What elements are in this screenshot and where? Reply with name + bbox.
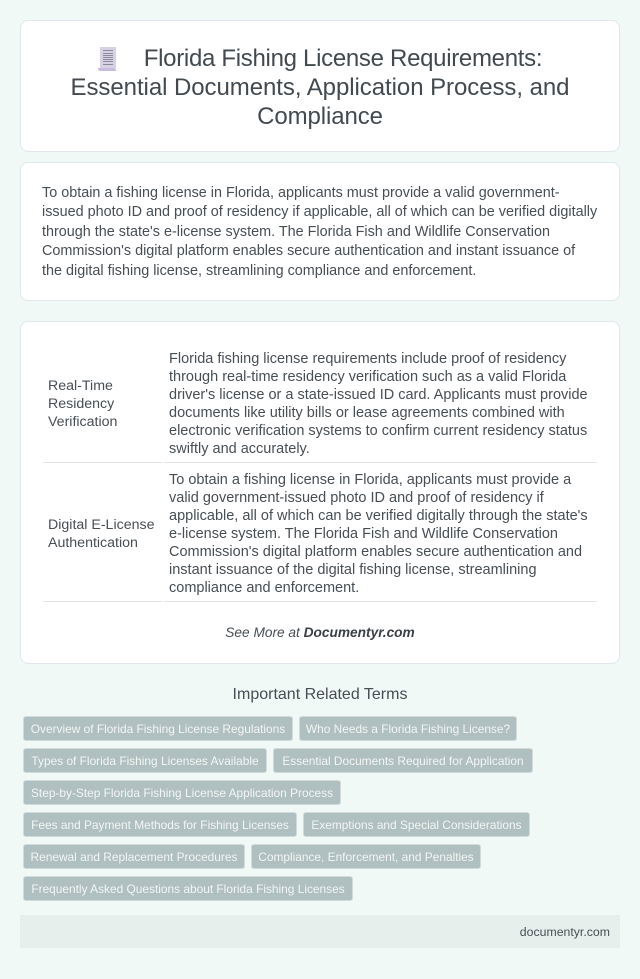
related term tags: Step-by-Step Florida Fishing License Application Process [31, 786, 333, 800]
table row: digital e-license authentication: To obtain a fishing license in Florida, applicants must provide a [169, 472, 571, 488]
title [71, 45, 569, 130]
title: Essential Documents, Application Process, and [71, 74, 569, 101]
related term tags: Frequently Asked Questions about Florida Fishing Licenses [31, 882, 345, 896]
heading: important related terms: Important Related Terms [233, 686, 407, 703]
panel: details table [20, 321, 620, 664]
table row: real-time residency verification: documents like utility bills or lease agreements combined with [169, 405, 565, 421]
text block: introduction: To obtain a fishing license in Florida, applicants must provide a valid government- [42, 185, 560, 201]
table row: real-time residency verification: driver's license or a state-issued ID card. Applicants must provide [169, 387, 588, 403]
table row: digital e-license authentication: instant issuance of the digital fishing license, streamlining [169, 562, 537, 578]
table row: real-time residency verification: Real-Time [48, 378, 113, 394]
text block: introduction [42, 185, 598, 279]
panel: title card [20, 20, 620, 152]
panel: introduction [20, 162, 620, 301]
table row: digital e-license authentication: e-license system. The Florida Fish and Wildlife Conservation [169, 526, 558, 542]
related term tags: Essential Documents Required for Application [282, 754, 524, 768]
table row: real-time residency verification: Verification [48, 414, 117, 430]
table row: digital e-license authentication [43, 472, 597, 602]
title: Florida Fishing License Requirements: [144, 45, 542, 72]
table row: real-time residency verification: swiftly and accurately. [169, 441, 310, 457]
table row: real-time residency verification: through real-time residency verification such as a valid Florida [169, 369, 566, 385]
related term tags: Exemptions and Special Considerations [311, 818, 522, 832]
text block: introduction: the digital fishing license, streamlining compliance and enforcement. [42, 263, 476, 279]
footer [20, 915, 620, 948]
related term tags: Overview of Florida Fishing License Regulations [31, 722, 285, 736]
related term tags [23, 716, 533, 901]
table row: digital e-license authentication: valid government-issued photo ID and proof of residency if [169, 490, 544, 506]
related term tags: Renewal and Replacement Procedures [31, 850, 237, 864]
text block: introduction: Commission's digital platform enables secure authentication and instant issuance of [42, 243, 575, 259]
text block: introduction: through the state's e-license system. The Florida Fish and Wildlife Conservation [42, 224, 550, 240]
title: Compliance [257, 103, 383, 130]
icon: document receipt [98, 47, 116, 71]
table row: digital e-license authentication: compliance and enforcement. [169, 580, 359, 596]
table row: real-time residency verification [43, 351, 597, 463]
table row: digital e-license authentication: Commission's digital platform enables secure authentication and [169, 544, 582, 560]
table row: real-time residency verification: Florida fishing license requirements include proof of residency [169, 351, 566, 367]
table row: real-time residency verification: electronic verification systems to confirm current residency status [169, 423, 587, 439]
text block: introduction: issued photo ID and proof of residency if applicable, all of which can be verified digitally [42, 204, 597, 220]
related term tags: Fees and Payment Methods for Fishing Licenses [31, 818, 289, 832]
related term tags: Compliance, Enforcement, and Penalties [258, 850, 474, 864]
table row: digital e-license authentication: Authentication [48, 535, 138, 551]
related term tags: Who Needs a Florida Fishing License? [306, 722, 510, 736]
table row: digital e-license authentication: applicable, all of which can be verified digitally through the state's [169, 508, 588, 524]
table row: digital e-license authentication: Digital E-License [48, 517, 154, 533]
table row: real-time residency verification: Residency [48, 396, 114, 412]
see more link: See More at Documentyr.com [225, 625, 415, 640]
related term tags: Types of Florida Fishing Licenses Available [31, 754, 259, 768]
footer: documentyr.com [520, 925, 610, 939]
